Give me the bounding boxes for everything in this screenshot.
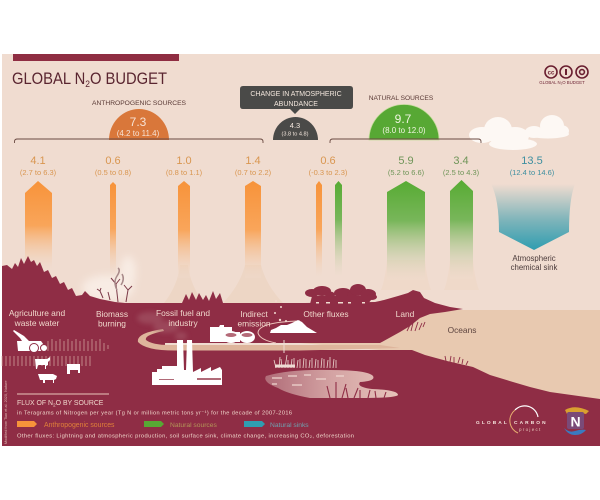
- gas dots: [274, 300, 287, 322]
- other fluxes trees: [305, 284, 377, 304]
- anthropogenic sources summary: [14, 100, 263, 143]
- global carbon project logo: project: [519, 427, 542, 432]
- change in atmospheric abundance: 4.3: [290, 121, 300, 130]
- flux values: 1.0: [176, 155, 192, 167]
- flux values: (5.2 to 6.6): [388, 168, 425, 177]
- wetland pond: [265, 370, 398, 398]
- pond ripples: [272, 375, 344, 385]
- land labels: industry: [168, 318, 198, 328]
- flux values: (0.8 to 1.1): [166, 168, 203, 177]
- legend block: FLUX OF N: [17, 400, 53, 407]
- biomass burning trees: [97, 268, 132, 302]
- land labels: burning: [98, 318, 126, 328]
- flux values: 0.6: [320, 155, 336, 167]
- other fluxes white land shape: [270, 320, 317, 333]
- flux values: (2.7 to 6.3): [20, 168, 57, 177]
- flux values: (2.5 to 4.3): [443, 168, 480, 177]
- legend block: Natural sinks: [270, 422, 309, 429]
- arrows: anthropogenic: [25, 181, 322, 278]
- land labels: waste water: [14, 318, 60, 328]
- land labels: emission: [237, 318, 271, 328]
- cloud: [469, 115, 569, 150]
- land labels: Agriculture and: [9, 308, 66, 318]
- land labels: Fossil fuel and: [156, 308, 210, 318]
- header bar: [13, 54, 179, 61]
- change in atmospheric abundance: CHANGE IN ATMOSPHERIC: [250, 91, 342, 98]
- sink label: Atmospheric: [512, 254, 556, 263]
- cows: [35, 357, 80, 383]
- global carbon project logo: CARBON: [514, 420, 548, 426]
- anthropogenic sources summary: ANTHROPOGENIC SOURCES: [92, 100, 187, 107]
- flux values: 0.6: [105, 155, 121, 167]
- international nitrogen initiative logo: [564, 407, 589, 435]
- international nitrogen initiative logo: N: [570, 414, 581, 430]
- source credit: Modified from Tian et al. 2020, Nature: [4, 380, 8, 444]
- change in atmospheric abundance: [240, 86, 353, 140]
- land labels: Biomass: [96, 309, 128, 319]
- flux values: (0.7 to 2.2): [235, 168, 272, 177]
- natural sources summary: (8.0 to 12.0): [382, 126, 426, 135]
- arrows: natural: [335, 180, 473, 280]
- legend block: Natural sources: [170, 422, 217, 429]
- legend block: in Teragrams of Nitrogen per year (Tg N or million metric tons yr⁻¹) for the decade of 2007-2016: [17, 410, 292, 416]
- land and soil: [2, 256, 600, 446]
- anthropogenic sources summary: (4.2 to 11.4): [117, 129, 160, 138]
- change in atmospheric abundance: ABUNDANCE: [274, 101, 318, 108]
- title: GLOBAL N: [12, 70, 94, 88]
- natural sources summary: NATURAL SOURCES: [369, 95, 434, 102]
- factory smoke: [137, 312, 187, 340]
- legend block: Anthropogenic sources: [44, 422, 115, 429]
- flux values: 3.4: [453, 155, 469, 167]
- wetland grass: [274, 340, 336, 368]
- river: [138, 321, 400, 351]
- wetland reeds: [327, 382, 386, 398]
- factory: [152, 340, 222, 385]
- tree base gaps: [316, 302, 365, 304]
- flux values: 13.5: [521, 155, 543, 167]
- anthropogenic sources summary: 7.3: [130, 115, 147, 129]
- faint arrow flares: [164, 260, 479, 303]
- licence icons: GLOBAL N₂O BUDGET: [539, 80, 585, 85]
- treatment plant: [210, 325, 255, 343]
- land labels: [9, 308, 415, 328]
- background panel: [2, 54, 600, 446]
- change in atmospheric abundance: (3.8 to 4.8): [281, 132, 309, 138]
- title: O BUDGET: [90, 70, 167, 88]
- ocean: [300, 310, 600, 400]
- legend block: [17, 394, 354, 440]
- land labels: Other fluxes: [303, 309, 349, 319]
- flux values: 1.4: [245, 155, 261, 167]
- global carbon project logo: GLOBAL: [476, 420, 509, 426]
- flux values: 5.9: [398, 155, 414, 167]
- smoke glow: [82, 256, 136, 301]
- flux values: (12.4 to 14.6): [510, 168, 555, 177]
- arrow: atmospheric sink: [491, 184, 575, 250]
- flux values: [20, 155, 555, 177]
- sink label: [511, 254, 557, 272]
- legend block: 2: [53, 402, 56, 408]
- land labels: Land: [396, 309, 415, 319]
- flux values: 4.1: [30, 155, 46, 167]
- oceans label: Oceans: [448, 325, 476, 335]
- licence icons: [539, 66, 588, 85]
- title: 2: [85, 79, 90, 90]
- shoreline grass: [407, 322, 468, 365]
- natural sources summary: [330, 95, 481, 143]
- legend block: O BY SOURCE: [56, 400, 104, 407]
- crop rows: [2, 339, 108, 366]
- sink label: chemical sink: [511, 263, 557, 272]
- flux values: (-0.3 to 2.3): [309, 168, 348, 177]
- licence icons: cc: [548, 70, 555, 76]
- land labels: Indirect: [240, 309, 268, 319]
- natural sources summary: 9.7: [395, 112, 412, 126]
- global carbon project logo: [476, 406, 548, 433]
- legend block: Other fluxes: Lightning and atmospheric production, soil surface sink, climate change, increasing CO₂, deforestation: [17, 434, 354, 440]
- combine harvester: [13, 330, 48, 352]
- flux values: (0.5 to 0.8): [95, 168, 132, 177]
